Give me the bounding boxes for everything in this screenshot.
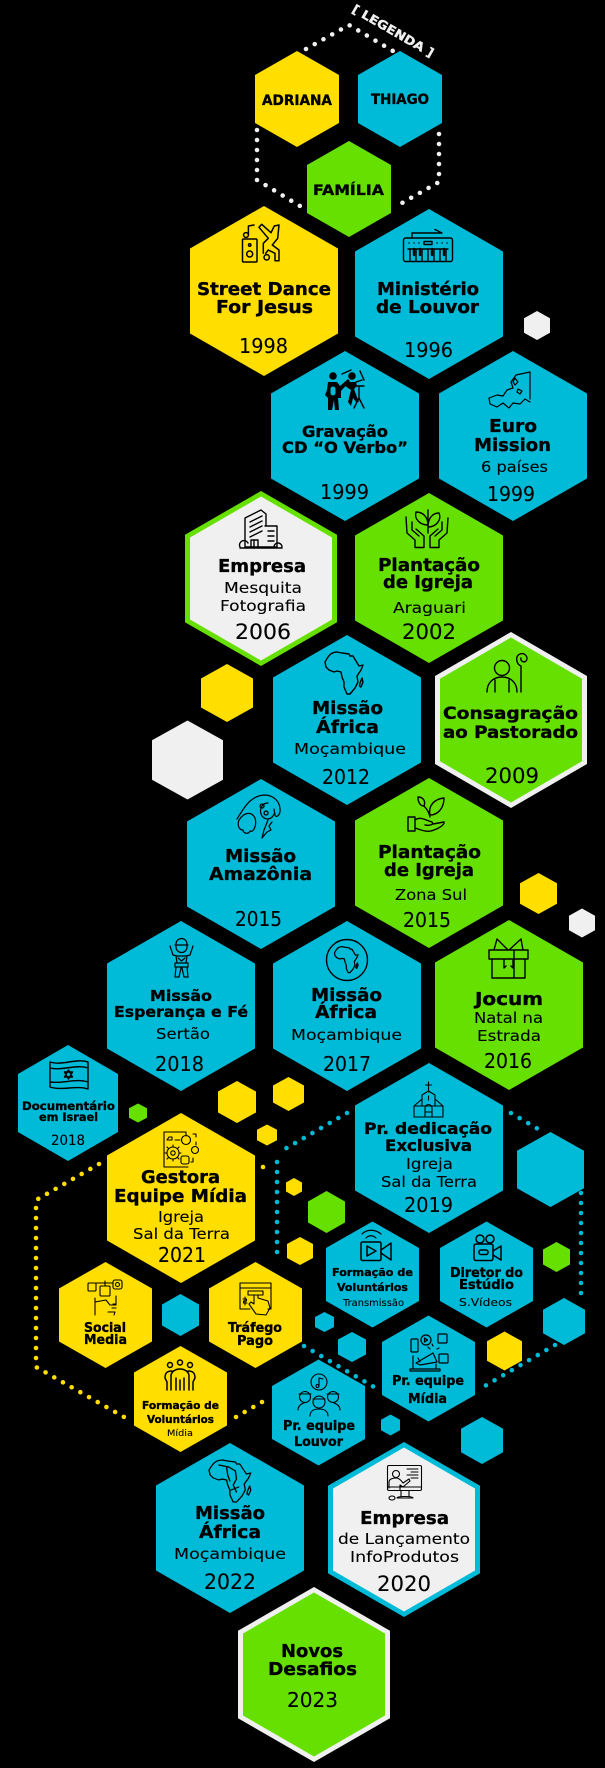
legend title: [ LEGENDA ]: [350, 2, 436, 60]
heading: [312, 698, 383, 738]
icon: keyboard: [404, 230, 452, 262]
yellow dotted outline: [36, 1164, 263, 1417]
heading: Pr. equipe: [392, 1374, 464, 1389]
subtitle: Sal da Terra: [381, 1173, 477, 1191]
subtitle: Mesquita: [224, 579, 302, 597]
year: 1998: [239, 334, 288, 358]
panel: Jocum 2016: [435, 920, 583, 1090]
panel: Missão Esperança e Fé 2018: [107, 921, 255, 1091]
year: 2009: [485, 764, 539, 789]
heading: [84, 1321, 127, 1348]
subtitle: Moçambique: [174, 1545, 286, 1563]
icon: church: [414, 1082, 443, 1117]
heading: [283, 1419, 355, 1450]
subtitle: [133, 1208, 230, 1243]
heading: [364, 1119, 492, 1155]
year: 2021: [158, 1243, 206, 1267]
panel: Street Dance 1998: [190, 206, 338, 376]
heading: Plantação: [378, 555, 480, 576]
subtitle: 6 países: [481, 458, 548, 476]
panel: Empresa InfoProdutos 2020: [328, 1442, 480, 1617]
heading: Voluntários: [337, 1281, 408, 1294]
icon: streaming camera: [361, 1230, 391, 1260]
heading: África: [316, 716, 379, 738]
icon: hands with plant: [406, 510, 448, 548]
subtitle: Mídia: [167, 1429, 193, 1439]
icon: Israeli flag: [50, 1061, 88, 1089]
heading: Mission: [474, 435, 551, 456]
heading: [114, 987, 248, 1021]
heading: Diretor do: [450, 1266, 523, 1281]
panel: Missão África 2017: [273, 921, 421, 1091]
subtitle: [220, 579, 306, 615]
legend: Adriana: ADRIANA: [262, 93, 333, 109]
heading: Gravação: [302, 422, 388, 441]
subtitle: [474, 1009, 543, 1045]
heading: [378, 842, 481, 881]
subtitle: [381, 1155, 477, 1191]
heading: [376, 279, 479, 318]
subtitle: Sertão: [156, 1025, 210, 1043]
heading: [142, 1400, 219, 1426]
legend: Adriana: [255, 51, 339, 147]
heading: [197, 279, 331, 318]
heading: [22, 1099, 115, 1124]
heading: [282, 422, 408, 457]
heading: Missão: [312, 698, 383, 719]
icon: Africa: [325, 652, 363, 694]
subtitle: S.Vídeos: [459, 1296, 512, 1309]
heading: [311, 985, 382, 1023]
heading: [474, 416, 551, 456]
panel: Ministério de Louvor 1996: [355, 209, 503, 379]
year: 2015: [403, 908, 451, 932]
legend dotted outline: [257, 25, 439, 207]
subtitle: [338, 1530, 470, 1566]
year: 2006: [235, 620, 291, 645]
heading: Equipe Mídia: [114, 1186, 247, 1207]
icon: parrot: [237, 795, 280, 838]
heading: Estúdio: [459, 1278, 514, 1293]
heading: Street Dance: [197, 279, 331, 300]
panel: Missão África 2012: [273, 635, 421, 805]
heading: Formação de: [142, 1400, 219, 1412]
legend: Thiago: [358, 51, 442, 147]
subtitle: Estrada: [477, 1027, 541, 1045]
heading: Voluntários: [147, 1414, 214, 1426]
heading: [378, 555, 480, 593]
year: 2022: [204, 1570, 256, 1595]
heading: Missão: [311, 985, 382, 1006]
heading: [392, 1374, 464, 1407]
heading: Missão: [225, 846, 296, 867]
icon: gift: [489, 939, 528, 978]
year: 2018: [155, 1052, 204, 1076]
subtitle: Sal da Terra: [133, 1225, 230, 1243]
heading: Media: [84, 1333, 127, 1348]
year: 2023: [287, 1688, 338, 1712]
heading: [195, 1503, 265, 1543]
legend: Família: FAMÍLIA: [313, 182, 385, 199]
heading: Esperança e Fé: [114, 1003, 248, 1021]
year: 2019: [404, 1193, 453, 1217]
icon: pastor: [487, 654, 527, 692]
icon: volunteers group: [165, 1360, 195, 1390]
heading: Exclusiva: [385, 1136, 472, 1155]
panel: Consagração ao Pastorado 2009: [435, 632, 587, 808]
heading: Documentário: [22, 1099, 115, 1113]
icon: dancer and speaker: [242, 224, 279, 262]
panel: Plantação Araguari 2002: [355, 493, 503, 663]
panel: Plantação Zona Sul 2015: [355, 778, 503, 948]
subtitle: InfoProdutos: [350, 1548, 459, 1566]
heading: de Louvor: [376, 297, 479, 318]
heading: Mídia: [408, 1392, 447, 1407]
panel: Missão África 2022: [156, 1443, 304, 1613]
heading: Euro: [489, 416, 537, 437]
heading: [228, 1320, 282, 1349]
icon: missionary figure: [170, 938, 193, 977]
panel: Formação de Voluntários Transmissão: [326, 1222, 419, 1328]
subtitle: Igreja: [406, 1155, 453, 1173]
heading: Ministério: [377, 279, 479, 300]
year: 2015: [235, 907, 282, 931]
heading: [443, 704, 578, 743]
panel: Diretor do Estúdio: [440, 1222, 533, 1328]
subtitle: Transmissão: [342, 1298, 404, 1309]
heading: Empresa: [360, 1508, 449, 1529]
icon: presenter on monitor: [388, 1466, 422, 1500]
heading: África: [315, 1001, 377, 1023]
icon: Europe map: [489, 372, 530, 408]
heading: Pr. dedicação: [364, 1119, 492, 1138]
cyan dotted outline: [277, 1113, 581, 1390]
heading: Missão: [195, 1503, 265, 1524]
icon: video camera: [474, 1235, 501, 1260]
heading: de Igreja: [384, 860, 474, 881]
icon: hand with sprout: [408, 797, 444, 831]
heading: Desafios: [268, 1659, 357, 1680]
panel: Missão Amazônia 2015: [187, 779, 335, 949]
heading: [114, 1167, 247, 1207]
heading: Novos: [281, 1641, 343, 1662]
heading: [209, 846, 312, 885]
panel: Tráfego Pago: [209, 1262, 302, 1368]
legend: Família: [307, 141, 391, 237]
panel: Euro Mission 1999: [439, 351, 587, 521]
heading: Consagração: [443, 704, 578, 724]
heading: [268, 1641, 357, 1680]
panel: Gestora Equipe Mídia 2021: [107, 1113, 255, 1283]
heading: For Jesus: [216, 297, 313, 318]
heading: Pago: [237, 1333, 273, 1349]
subtitle: Moçambique: [294, 740, 406, 758]
icon: media management: [164, 1132, 198, 1167]
heading: Louvor: [294, 1435, 344, 1450]
heading: Empresa: [218, 556, 306, 577]
subtitle: Moçambique: [291, 1026, 402, 1044]
heading: de Igreja: [383, 572, 473, 593]
heading: Tráfego: [228, 1320, 282, 1336]
year: 1999: [487, 482, 535, 506]
panel: Pr. equipe Louvor: [272, 1360, 365, 1466]
heading: Amazônia: [209, 864, 312, 885]
year: 2002: [402, 620, 456, 645]
subtitle: Natal na: [474, 1009, 543, 1027]
heading: [332, 1266, 413, 1294]
heading: Formação de: [332, 1266, 413, 1279]
heading: África: [199, 1521, 261, 1543]
year: 2018: [51, 1133, 85, 1149]
icon: Africa in circle: [326, 940, 368, 980]
subtitle: Igreja: [158, 1208, 204, 1226]
heading: [450, 1266, 523, 1293]
heading: Pr. equipe: [283, 1419, 355, 1434]
heading: Missão: [150, 987, 212, 1005]
panel: Novos Desafios 2023: [238, 1587, 390, 1762]
heading: CD “O Verbo”: [282, 438, 408, 457]
heading: em Israel: [39, 1110, 98, 1124]
panel: Empresa Mesquita Fotografia 2006: [185, 491, 337, 666]
legend: Thiago: THIAGO: [371, 92, 429, 108]
year: 2012: [322, 765, 370, 789]
subtitle: Fotografia: [220, 597, 306, 615]
icon: band: [325, 370, 364, 410]
year: 2017: [323, 1052, 371, 1076]
panel: Social Media: [59, 1262, 152, 1368]
year: 1999: [320, 480, 369, 504]
year: 2016: [484, 1049, 532, 1073]
subtitle: Araguari: [393, 599, 466, 617]
panel: Formação de Voluntários Mídia: [134, 1346, 227, 1452]
icon: megaphone and media: [410, 1334, 448, 1371]
panel: Gravação CD 1999: [271, 351, 419, 521]
heading: Gestora: [141, 1167, 220, 1188]
heading: Plantação: [378, 842, 481, 863]
heading: Jocum: [473, 989, 543, 1010]
icon: building: [240, 510, 282, 548]
heading: ao Pastorado: [443, 723, 578, 743]
panel: Pr. dedicação Exclusiva 2019: [355, 1063, 503, 1233]
subtitle: de Lançamento: [338, 1530, 470, 1548]
icon: click on browser: [240, 1283, 271, 1315]
subtitle: Zona Sul: [395, 886, 467, 904]
year: 1996: [404, 338, 453, 362]
icon: Africa with countries: [209, 1460, 251, 1502]
panel: Pr. equipe Mídia: [382, 1316, 475, 1422]
decorative small hexagons: [129, 311, 595, 1464]
heading: Social: [84, 1321, 126, 1336]
icon: social media hand: [88, 1280, 122, 1315]
year: 2020: [377, 1572, 431, 1597]
panel: Documentário em Israel 2018: [18, 1045, 118, 1161]
icon: worship team: [298, 1374, 340, 1416]
